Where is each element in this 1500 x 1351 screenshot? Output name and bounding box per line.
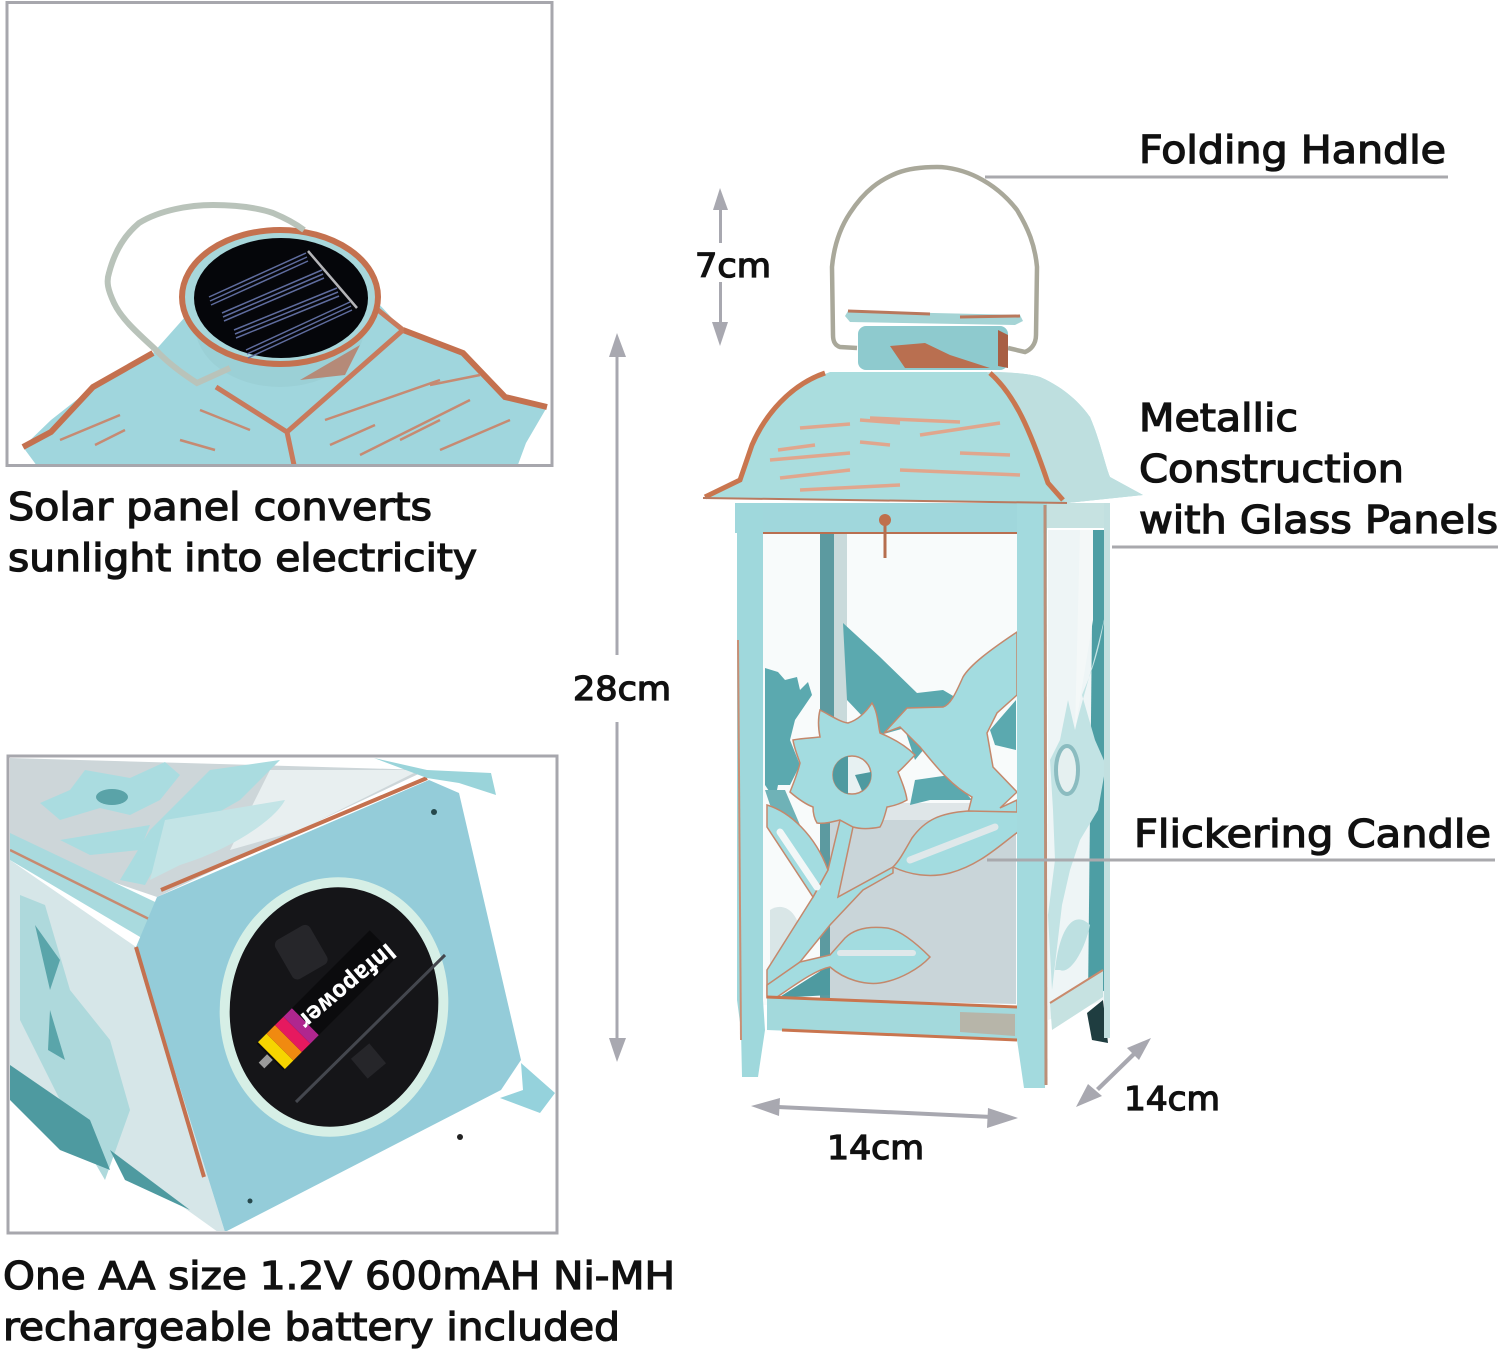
- arrow: 14cm width: [751, 1098, 1018, 1128]
- AA battery: [257, 930, 397, 1070]
- battery compartment ring: [220, 877, 448, 1137]
- inner pole: [820, 533, 834, 1003]
- top frame side: [1047, 503, 1110, 528]
- label: flickering candle: Flickering Candle: [1134, 812, 1491, 857]
- solar cell grid lines: [209, 253, 352, 358]
- rear bird silhouette: [843, 623, 960, 735]
- glass side: [1048, 530, 1105, 1020]
- AA battery: Infapower: [293, 937, 401, 1035]
- battery compartment: [230, 887, 438, 1127]
- candle: [830, 812, 1016, 1004]
- roof eave: [374, 758, 496, 795]
- side flower cut-out: [1048, 615, 1106, 990]
- open side face through glass: [10, 758, 427, 897]
- caption: solar panel: sunlight into electricity: [8, 536, 477, 581]
- panel: battery photo: [10, 758, 555, 1232]
- panel border: battery photo: [8, 756, 557, 1233]
- flower cut-out on open side: [40, 762, 180, 820]
- base plate: [136, 780, 521, 1232]
- leader line: metallic construction: [1112, 546, 1498, 548]
- leader line: folding handle: [985, 176, 1448, 178]
- leader line: flickering candle: [987, 858, 1495, 862]
- caption: battery: [3, 1254, 675, 1350]
- roof: [703, 372, 1143, 503]
- label: folding handle: Folding Handle: [1139, 128, 1446, 173]
- roof foot: [500, 1063, 555, 1113]
- folding handle: [832, 167, 1037, 352]
- far foot: [1087, 1000, 1108, 1043]
- leaf slots: [910, 827, 995, 860]
- left leaf cut-out: [767, 805, 828, 897]
- roof seen from above: [23, 303, 547, 470]
- label: metallic construction: with Glass Panels: [1139, 498, 1498, 543]
- flower stem cut-out: [767, 820, 893, 997]
- label: metallic construction: Construction: [1139, 447, 1404, 492]
- flower hole: [833, 756, 871, 794]
- bottom rail front: [767, 997, 1017, 1040]
- lantern: [703, 167, 1143, 1088]
- glass front: [760, 530, 1022, 1005]
- rear flower silhouette: [765, 668, 812, 800]
- label: metallic construction: Metallic: [1139, 396, 1298, 441]
- left side face: [10, 860, 225, 1232]
- side bottom rail: [1050, 970, 1103, 1030]
- panel: solar panel photo: [23, 205, 547, 470]
- caption: solar panel: [8, 485, 477, 581]
- flower cut-out: [790, 703, 915, 828]
- corner post left: [737, 503, 765, 1077]
- solar cap rim: [182, 230, 378, 364]
- dimension: 28cm: 28cm: [573, 669, 671, 708]
- roof copper edges: [705, 373, 1063, 500]
- top plate: [845, 311, 1023, 325]
- roof side: [987, 372, 1143, 503]
- label: metallic construction: [1139, 396, 1498, 543]
- solar cell: [194, 238, 368, 358]
- hummingbird cut-out: [884, 632, 1017, 813]
- top frame front: [735, 503, 1047, 533]
- dimension: 14cm depth: 14cm: [1124, 1079, 1220, 1118]
- caption: battery: rechargeable battery included: [3, 1305, 620, 1350]
- far post: [1104, 503, 1110, 1038]
- panel border: solar panel photo: [7, 2, 552, 466]
- dimension: 7cm: 7cm: [695, 246, 771, 285]
- frame rail: [10, 833, 155, 937]
- lower leaf cut-out: [767, 927, 930, 997]
- arrow: 28cm height: [609, 333, 626, 1062]
- dimension: 14cm width: 14cm: [827, 1128, 924, 1167]
- neck: [858, 326, 1008, 370]
- roof scratches: [770, 418, 1020, 490]
- arrow: 7cm height: [712, 188, 728, 346]
- corner post right: [1017, 503, 1047, 1088]
- folding handle: [108, 205, 304, 383]
- caption: solar panel: Solar panel converts: [8, 485, 432, 530]
- arrow: 14cm depth: [1076, 1038, 1151, 1107]
- caption: battery: One AA size 1.2V 600mAH Ni-MH: [3, 1254, 675, 1299]
- upper leaf cut-out: [893, 811, 1018, 875]
- solar cap cup: [195, 263, 365, 387]
- hook: [884, 515, 886, 558]
